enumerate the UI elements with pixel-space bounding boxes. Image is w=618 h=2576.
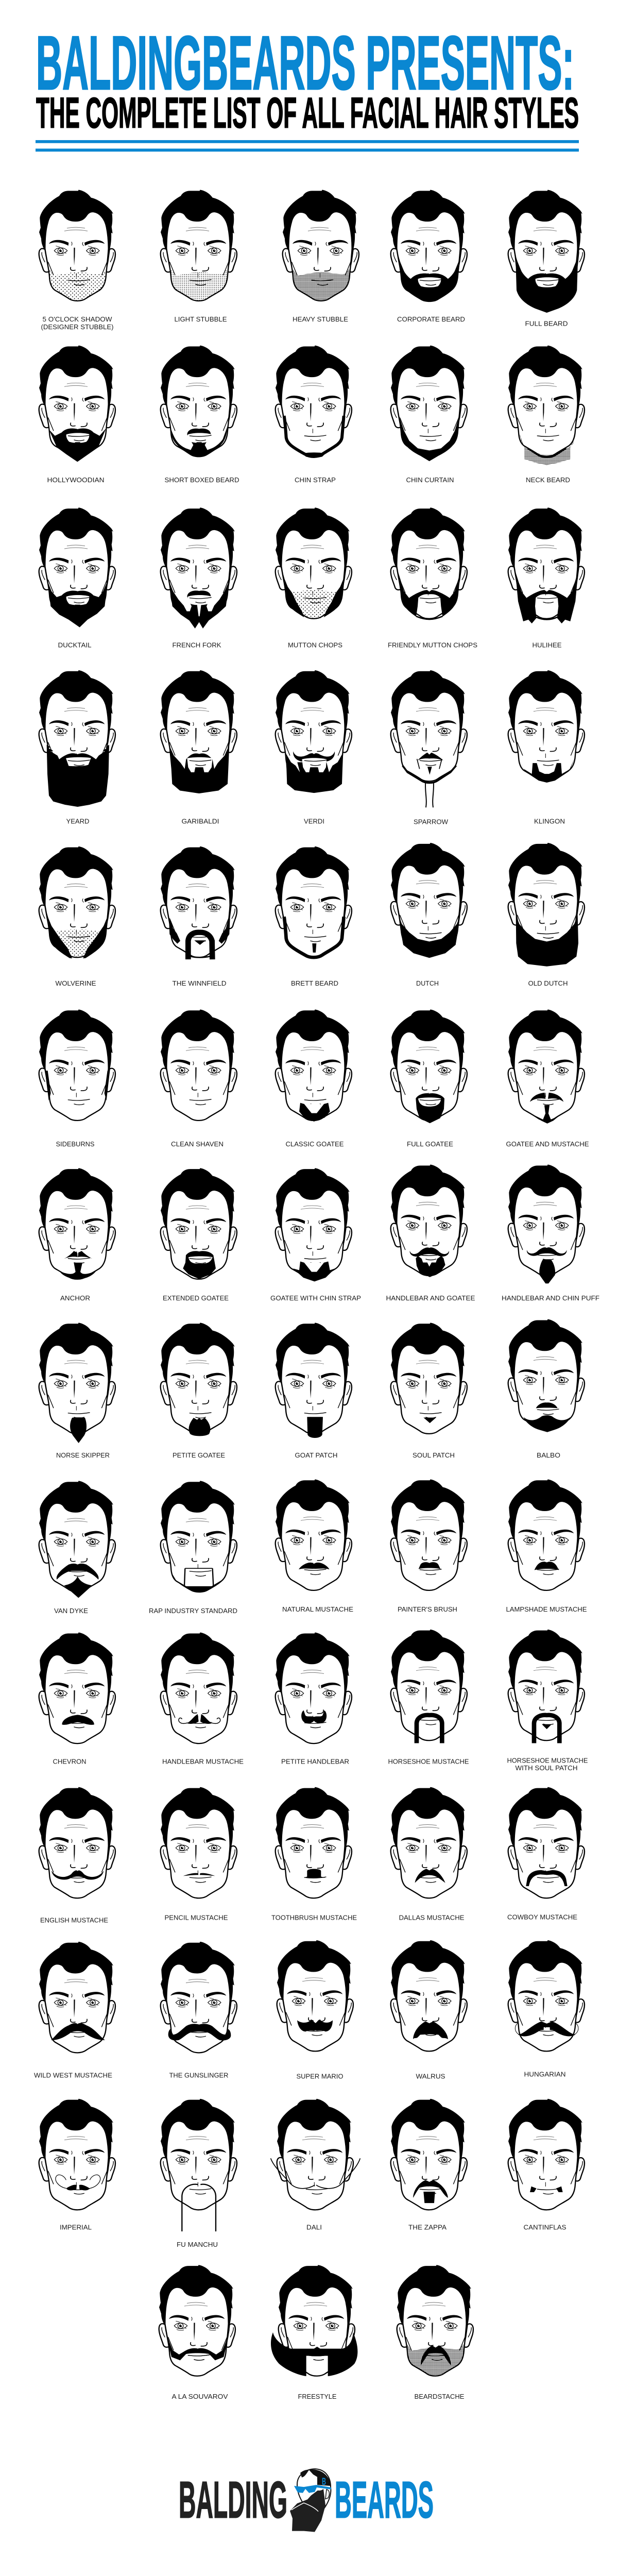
label: FU MANCHU bbox=[177, 2241, 218, 2248]
label: HANDLEBAR AND GOATEE bbox=[386, 1294, 475, 1302]
portrait bbox=[508, 507, 585, 623]
portrait bbox=[391, 1009, 467, 1123]
label: HORSESHOE MUSTACHE bbox=[507, 1757, 588, 1764]
portrait bbox=[508, 1630, 585, 1743]
style: pencil mustache bbox=[161, 1787, 237, 1921]
style: horseshoe mustache bbox=[388, 1630, 469, 1765]
style: mutton chops bbox=[276, 507, 352, 649]
style: wild west mustache bbox=[34, 1942, 115, 2079]
style: anchor bbox=[39, 1168, 115, 1302]
portrait bbox=[276, 1323, 352, 1438]
logo icon: bearded head with sunglasses: B bbox=[322, 2476, 326, 2487]
style: 5 o'clock shadow: (DESIGNER STUBBLE) bbox=[41, 323, 113, 331]
style: beardstache bbox=[397, 2265, 473, 2400]
label: CHIN STRAP bbox=[295, 476, 336, 484]
label: SHORT BOXED BEARD bbox=[165, 476, 239, 484]
label: CLEAN SHAVEN bbox=[171, 1140, 224, 1148]
portrait bbox=[391, 190, 467, 302]
portrait bbox=[161, 1787, 237, 1898]
portrait bbox=[39, 1787, 115, 1898]
label: HANDLEBAR MUSTACHE bbox=[162, 1758, 244, 1765]
style: klingon bbox=[508, 670, 585, 825]
label: RAP INDUSTRY STANDARD bbox=[149, 1607, 237, 1615]
style: hungarian bbox=[508, 1940, 585, 2078]
label: GOATEE AND MUSTACHE bbox=[506, 1140, 589, 1148]
label: ENGLISH MUSTACHE bbox=[40, 1916, 108, 1924]
label: NATURAL MUSTACHE bbox=[282, 1605, 353, 1613]
portrait bbox=[39, 345, 115, 462]
logo cap initials: B bbox=[318, 2476, 322, 2487]
label: HULIHEE bbox=[533, 641, 562, 649]
style: fu manchu bbox=[161, 2099, 237, 2248]
style: super mario bbox=[277, 1940, 353, 2080]
label: FREESTYLE bbox=[298, 2393, 337, 2400]
logo: BALDING bbox=[179, 2471, 287, 2529]
style: ducktail bbox=[39, 507, 115, 649]
label: FRIENDLY MUTTON CHOPS bbox=[388, 641, 477, 649]
style: hollywoodian bbox=[39, 345, 115, 484]
label: CHIN CURTAIN bbox=[406, 476, 454, 484]
style: neck beard bbox=[508, 345, 585, 484]
style: goat patch bbox=[276, 1323, 352, 1459]
style: verdi bbox=[276, 670, 352, 825]
style: extended goatee bbox=[161, 1168, 237, 1302]
style: heavy stubble bbox=[283, 190, 359, 323]
style: old dutch bbox=[508, 843, 585, 987]
label: HOLLYWOODIAN bbox=[47, 476, 105, 484]
portrait bbox=[39, 1942, 115, 2053]
style: rap industry standard bbox=[149, 1481, 237, 1615]
style: chin strap bbox=[276, 345, 352, 484]
label: PAINTER'S BRUSH bbox=[398, 1605, 457, 1613]
portrait bbox=[391, 345, 467, 461]
portrait bbox=[508, 345, 585, 465]
portrait bbox=[159, 2265, 235, 2376]
style: petite handlebar bbox=[276, 1633, 352, 1765]
portrait bbox=[276, 846, 352, 957]
portrait bbox=[39, 507, 115, 628]
logo icon: bearded head with sunglasses bbox=[290, 2469, 331, 2532]
label: BEARDSTACHE bbox=[414, 2393, 465, 2400]
style: brett beard bbox=[276, 846, 352, 987]
label: HEAVY STUBBLE bbox=[293, 315, 348, 323]
portrait bbox=[39, 2099, 115, 2210]
style: horseshoe mustache with soul patch: WITH SOUL PATCH bbox=[515, 1764, 577, 1772]
text: BEARDS bbox=[335, 2471, 434, 2529]
label: LIGHT STUBBLE bbox=[174, 315, 227, 323]
portrait bbox=[391, 1164, 467, 1277]
style: chevron bbox=[39, 1633, 115, 1765]
portrait bbox=[39, 190, 115, 301]
style: friendly mutton chops bbox=[388, 507, 477, 649]
portrait bbox=[276, 1009, 352, 1122]
style: horseshoe mustache with soul patch bbox=[507, 1630, 588, 1772]
label: CHEVRON bbox=[53, 1758, 87, 1765]
style: english mustache bbox=[39, 1787, 115, 1924]
style: handlebar mustache bbox=[161, 1633, 244, 1765]
portrait bbox=[508, 190, 585, 313]
label: TOOTHBRUSH MUSTACHE bbox=[271, 1914, 357, 1921]
portrait bbox=[508, 2099, 585, 2210]
label: GOATEE WITH CHIN STRAP bbox=[270, 1294, 361, 1302]
portrait bbox=[161, 1633, 237, 1743]
style: short boxed beard bbox=[161, 345, 239, 484]
portrait bbox=[508, 1319, 585, 1432]
portrait bbox=[508, 670, 585, 783]
style: goatee with chin strap bbox=[270, 1168, 361, 1302]
portrait bbox=[391, 1940, 467, 2051]
portrait bbox=[39, 1168, 115, 1279]
portrait bbox=[508, 1787, 585, 1898]
style: a la souvarov bbox=[159, 2265, 235, 2400]
label: WILD WEST MUSTACHE bbox=[34, 2072, 112, 2079]
label: COWBOY MUSTACHE bbox=[507, 1913, 577, 1921]
style: lampshade mustache bbox=[506, 1479, 587, 1613]
label: HORSESHOE MUSTACHE bbox=[388, 1758, 469, 1765]
label: DALLAS MUSTACHE bbox=[399, 1914, 465, 1921]
portrait bbox=[508, 1009, 585, 1124]
portrait bbox=[271, 2265, 357, 2376]
label: THE ZAPPA bbox=[408, 2224, 447, 2231]
style: handlebar and goatee bbox=[386, 1164, 475, 1302]
label: DUCKTAIL bbox=[58, 641, 92, 649]
label: VERDI bbox=[304, 818, 324, 825]
label: PENCIL MUSTACHE bbox=[165, 1914, 228, 1921]
label: BRETT BEARD bbox=[291, 979, 338, 987]
portrait bbox=[161, 846, 237, 959]
portrait bbox=[161, 507, 237, 629]
portrait bbox=[276, 1168, 352, 1281]
portrait bbox=[508, 1479, 585, 1590]
portrait bbox=[161, 2099, 237, 2231]
label: YEARD bbox=[66, 818, 90, 825]
portrait bbox=[391, 1630, 467, 1743]
style: freestyle bbox=[271, 2265, 357, 2400]
label: IMPERIAL bbox=[60, 2224, 92, 2231]
label: LAMPSHADE MUSTACHE bbox=[506, 1605, 587, 1613]
style: walrus bbox=[391, 1940, 467, 2080]
style: the winnfield bbox=[161, 846, 237, 987]
style: sideburns bbox=[39, 1009, 115, 1148]
label: DALI bbox=[306, 2224, 322, 2231]
title bbox=[36, 20, 579, 151]
style: painter's brush bbox=[391, 1479, 467, 1613]
label: THE GUNSLINGER bbox=[169, 2072, 228, 2079]
portrait bbox=[276, 1787, 352, 1898]
style: full beard bbox=[508, 190, 585, 327]
label: SPARROW bbox=[414, 818, 448, 825]
style: toothbrush mustache bbox=[271, 1787, 357, 1921]
portrait bbox=[39, 1633, 115, 1743]
style: dutch bbox=[391, 843, 467, 987]
label: HANDLEBAR AND CHIN PUFF bbox=[502, 1294, 599, 1302]
portrait bbox=[39, 1323, 115, 1443]
style: light stubble bbox=[161, 190, 237, 323]
portrait bbox=[161, 345, 237, 457]
label: FULL GOATEE bbox=[407, 1140, 453, 1148]
label: KLINGON bbox=[534, 818, 565, 825]
style: dali bbox=[271, 2099, 360, 2231]
style: 5 o'clock shadow bbox=[39, 190, 115, 331]
style: sparrow bbox=[391, 670, 467, 825]
portrait bbox=[391, 2099, 467, 2210]
portrait bbox=[277, 1940, 353, 2051]
label: FRENCH FORK bbox=[173, 641, 221, 649]
portrait bbox=[161, 190, 237, 301]
portrait bbox=[271, 2099, 360, 2210]
label: OLD DUTCH bbox=[528, 979, 568, 987]
style: cowboy mustache bbox=[507, 1787, 585, 1921]
portrait bbox=[39, 1009, 115, 1121]
portrait bbox=[508, 1940, 585, 2051]
portrait bbox=[161, 1942, 237, 2053]
style: dallas mustache bbox=[391, 1787, 467, 1921]
label: PETITE GOATEE bbox=[173, 1451, 225, 1459]
label: THE WINNFIELD bbox=[173, 979, 227, 987]
portrait bbox=[391, 670, 467, 807]
portrait bbox=[161, 1009, 237, 1121]
portrait bbox=[161, 1481, 237, 1592]
portrait bbox=[276, 670, 352, 793]
style: clean shaven bbox=[161, 1009, 237, 1148]
label: A LA SOUVAROV bbox=[171, 2393, 228, 2400]
portrait bbox=[391, 1479, 467, 1590]
label: BALBO bbox=[537, 1451, 560, 1459]
style: classic goatee bbox=[276, 1009, 352, 1148]
portrait bbox=[161, 1323, 237, 1436]
label: PETITE HANDLEBAR bbox=[281, 1758, 349, 1765]
portrait bbox=[391, 1323, 467, 1434]
style: chin curtain bbox=[391, 345, 467, 484]
style: handlebar and chin puff bbox=[502, 1164, 599, 1302]
label: VAN DYKE bbox=[54, 1607, 88, 1615]
label: FULL BEARD bbox=[525, 319, 568, 327]
portrait bbox=[397, 2265, 473, 2376]
label: CLASSIC GOATEE bbox=[285, 1140, 344, 1148]
label: GARIBALDI bbox=[182, 818, 219, 825]
portrait bbox=[39, 1481, 115, 1598]
portrait bbox=[276, 1479, 352, 1590]
style: garibaldi bbox=[161, 670, 237, 825]
style: yeard bbox=[39, 670, 115, 825]
label: EXTENDED GOATEE bbox=[163, 1294, 229, 1302]
portrait bbox=[391, 843, 467, 958]
label: CORPORATE BEARD bbox=[397, 315, 465, 323]
style: natural mustache bbox=[276, 1479, 353, 1613]
portrait bbox=[508, 1164, 585, 1283]
style: the zappa bbox=[391, 2099, 467, 2231]
style: hulihee bbox=[508, 507, 585, 649]
portrait bbox=[161, 1168, 237, 1279]
portrait bbox=[276, 345, 352, 458]
label: SOUL PATCH bbox=[413, 1451, 455, 1459]
portrait bbox=[276, 507, 352, 619]
style: the gunslinger bbox=[161, 1942, 237, 2079]
label: SUPER MARIO bbox=[296, 2072, 343, 2080]
style: goatee and mustache bbox=[506, 1009, 589, 1148]
style: soul patch bbox=[391, 1323, 467, 1459]
portrait bbox=[39, 846, 115, 958]
style: petite goatee bbox=[161, 1323, 237, 1459]
label: CANTINFLAS bbox=[523, 2224, 566, 2231]
label: DUTCH bbox=[416, 979, 439, 987]
label: NECK BEARD bbox=[526, 476, 570, 484]
style: imperial bbox=[39, 2099, 115, 2231]
style: corporate beard bbox=[391, 190, 467, 323]
label: HUNGARIAN bbox=[524, 2071, 565, 2078]
label: ANCHOR bbox=[60, 1294, 90, 1302]
label: NORSE SKIPPER bbox=[56, 1451, 110, 1459]
label: SIDEBURNS bbox=[56, 1140, 95, 1148]
portrait bbox=[391, 1787, 467, 1898]
style: van dyke bbox=[39, 1481, 115, 1615]
portrait bbox=[39, 670, 115, 807]
style: norse skipper bbox=[39, 1323, 115, 1459]
portrait bbox=[161, 670, 237, 793]
style: balbo bbox=[508, 1319, 585, 1459]
portrait bbox=[508, 843, 585, 967]
style: wolverine bbox=[39, 846, 115, 987]
style: french fork bbox=[161, 507, 237, 649]
label: GOAT PATCH bbox=[295, 1451, 338, 1459]
style: full goatee bbox=[391, 1009, 467, 1148]
label: WALRUS bbox=[416, 2072, 445, 2080]
label: MUTTON CHOPS bbox=[288, 641, 342, 649]
portrait bbox=[391, 507, 467, 619]
label: 5 O'CLOCK SHADOW bbox=[43, 315, 112, 323]
portrait bbox=[283, 190, 359, 301]
label: WOLVERINE bbox=[56, 979, 96, 987]
portrait bbox=[276, 1633, 352, 1743]
style: cantinflas bbox=[508, 2099, 585, 2231]
